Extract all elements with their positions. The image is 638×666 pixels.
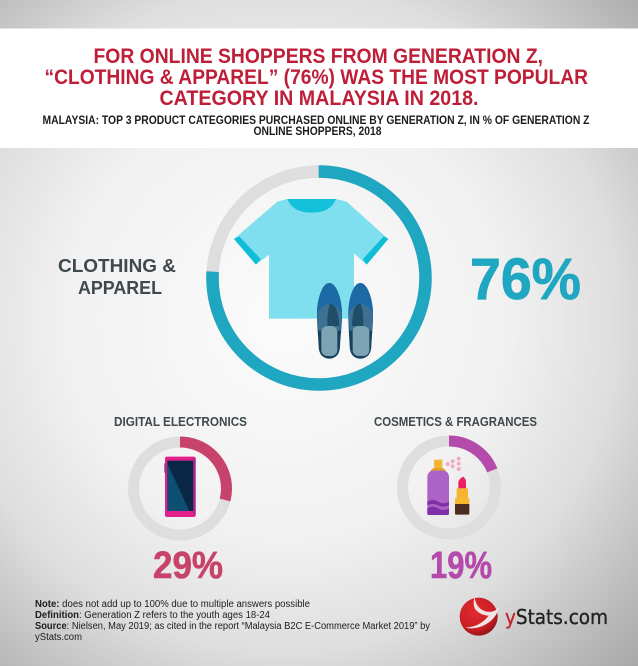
label: cosmetics and fragrances: COSMETICS & FRAGRANCES (374, 415, 537, 429)
title (44, 45, 588, 110)
header panel (0, 28, 638, 148)
donut chart: 29% (134, 442, 226, 535)
donut chart: 19% (402, 441, 496, 534)
icon: spray bottle and lipstick (427, 457, 469, 515)
panel: clothing and apparel (58, 172, 581, 384)
icon: shoes (317, 283, 373, 359)
subtitle: ONLINE SHOPPERS, 2018 (254, 126, 382, 138)
logo: yStats.com (460, 597, 608, 636)
donut chart: 76% (212, 172, 426, 384)
title: FOR ONLINE SHOPPERS FROM GENERATION Z, (94, 45, 543, 68)
notes: Note: does not add up to 100% due to multiple answers possible (35, 599, 310, 610)
panel: digital electronics (114, 415, 247, 587)
notes (35, 599, 430, 643)
label: clothing and apparel: APPAREL (78, 277, 162, 298)
panel: cosmetics and fragrances (374, 415, 537, 587)
value: 76%: 76% (470, 247, 581, 312)
title: CATEGORY IN MALAYSIA IN 2018. (160, 87, 478, 110)
value: 19%: 19% (430, 545, 492, 587)
icon: red globe (460, 597, 499, 636)
notes: yStats.com (35, 632, 82, 643)
label: digital electronics: DIGITAL ELECTRONICS (114, 415, 247, 429)
subtitle (42, 115, 590, 138)
wordmark: yStats.com (505, 605, 608, 629)
label: clothing and apparel: CLOTHING & (58, 255, 176, 276)
value: 29%: 29% (153, 545, 223, 587)
icon: smartphone (164, 457, 196, 517)
subtitle: MALAYSIA: TOP 3 PRODUCT CATEGORIES PURCHASED ONLINE BY GENERATION Z, IN % OF GENERATION Z (42, 115, 590, 127)
notes: Source: Nielsen, May 2019; as cited in the report “Malaysia B2C E-Commerce Market 2019” by (35, 621, 430, 632)
notes: Definition: Generation Z refers to the youth ages 18-24 (35, 610, 270, 621)
title: “CLOTHING & APPAREL” (76%) WAS THE MOST POPULAR (44, 66, 588, 89)
label: clothing and apparel (58, 255, 176, 298)
icon: t-shirt (234, 199, 388, 319)
